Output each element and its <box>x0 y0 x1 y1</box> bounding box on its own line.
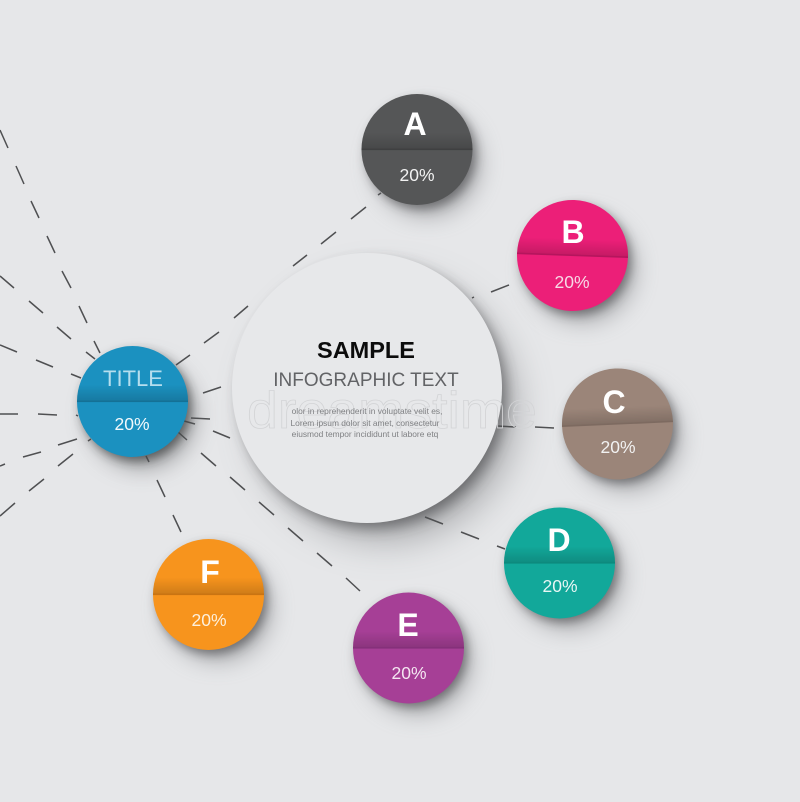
value F: 20% <box>191 610 227 630</box>
value E: 20% <box>391 663 427 683</box>
watermark: dreamstime <box>247 382 537 440</box>
circle F <box>152 538 270 660</box>
circle B <box>515 198 634 321</box>
value D: 20% <box>542 576 578 596</box>
body text: olor in reprehenderit in voluptate velit es, <box>292 406 442 416</box>
label D: D <box>547 522 571 558</box>
label F: F <box>200 554 220 590</box>
value C: 20% <box>600 437 636 457</box>
body text: eiusmod tempor incididunt ut labore etq <box>292 429 439 439</box>
value A: 20% <box>399 165 435 185</box>
label B: B <box>561 214 585 250</box>
circle D <box>504 507 621 628</box>
central circle <box>232 253 537 523</box>
circle TITLE <box>76 346 194 467</box>
value B: 20% <box>554 272 590 292</box>
central circle disc <box>232 253 502 523</box>
body text: Lorem ipsum dolor sit amet, consectetur <box>291 418 440 428</box>
circle A <box>361 94 479 215</box>
label C: C <box>602 384 626 420</box>
body text <box>291 406 442 439</box>
label A: A <box>403 106 427 142</box>
dashed connector lines <box>0 130 554 591</box>
value TITLE: 20% <box>114 414 150 434</box>
circle E <box>352 592 470 713</box>
central circle shadow <box>240 262 513 538</box>
heading: sample: SAMPLE <box>317 337 415 363</box>
circle C <box>559 366 679 489</box>
label E: E <box>397 607 419 643</box>
label TITLE: TITLE <box>103 366 163 391</box>
subheading: infographic text: INFOGRAPHIC TEXT <box>273 370 459 391</box>
